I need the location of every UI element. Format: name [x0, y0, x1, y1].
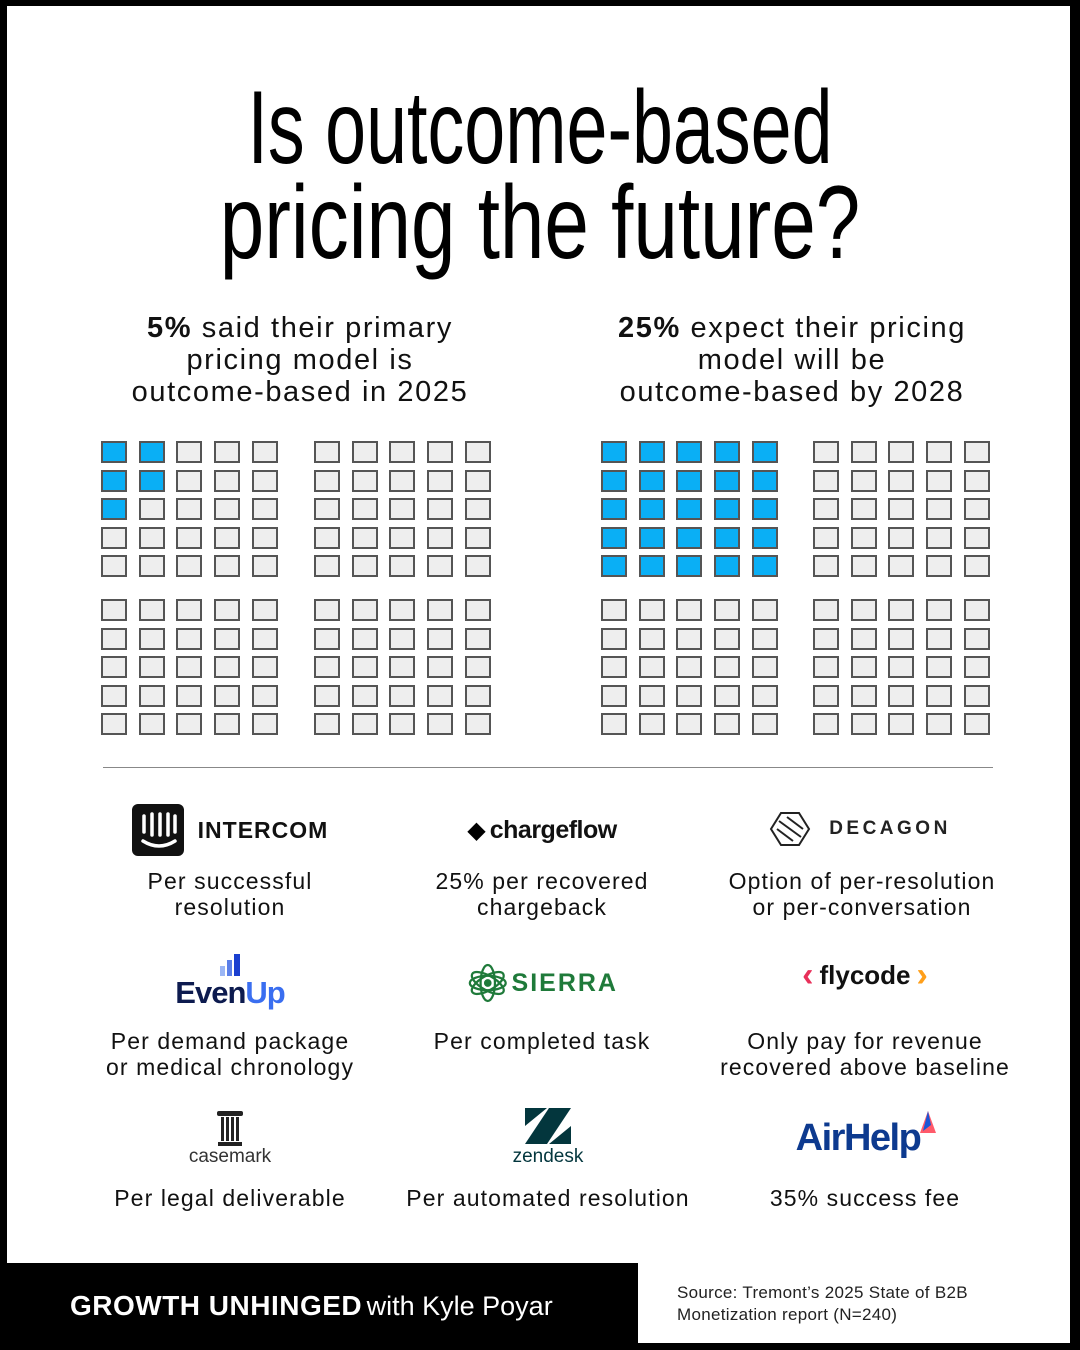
desc: sierra: Per completed task — [434, 1028, 650, 1054]
footer: brand — [0, 1263, 638, 1350]
logo: flycode: › — [917, 956, 928, 994]
heading: left stat — [132, 312, 468, 408]
desc: decagon: Option of per-resolution — [729, 868, 995, 894]
heading: left stat: outcome-based in 2025 — [132, 376, 468, 408]
footer: source: Monetization report (N=240) — [677, 1305, 897, 1324]
desc: airhelp: 35% success fee — [770, 1185, 960, 1211]
desc: evenup: Per demand package — [111, 1028, 349, 1054]
logo: evenup: EvenUp — [175, 975, 285, 1010]
desc: intercom — [148, 868, 312, 920]
title — [220, 70, 860, 280]
logo: zendesk — [513, 1108, 584, 1167]
desc: flycode: Only pay for revenue — [747, 1028, 983, 1054]
title: Is outcome-based — [247, 70, 833, 185]
desc: evenup — [106, 1028, 354, 1080]
logo: flycode — [802, 956, 928, 994]
footer: source — [638, 1263, 1070, 1343]
heading: left stat: 5% said their primary — [147, 312, 453, 344]
desc: casemark: Per legal deliverable — [114, 1185, 346, 1211]
desc: decagon: or per-conversation — [752, 894, 972, 920]
footer: source: Source: Tremont’s 2025 State of B2B — [677, 1283, 968, 1302]
heading: left stat: pricing model is — [186, 344, 414, 376]
desc: chargeflow: chargeback — [477, 894, 607, 920]
logo: flycode: flycode — [819, 960, 911, 990]
desc: evenup: or medical chronology — [106, 1054, 354, 1080]
logo: evenup — [175, 954, 285, 1010]
desc: flycode: recovered above baseline — [720, 1054, 1010, 1080]
logo: decagon — [770, 812, 951, 846]
desc: flycode — [720, 1028, 1010, 1080]
logo: casemark — [189, 1111, 272, 1167]
title: pricing the future? — [220, 164, 860, 280]
logo: sierra: SIERRA — [512, 968, 618, 996]
logo: chargeflow: chargeflow — [490, 816, 617, 844]
logo: chargeflow: ◆ — [467, 816, 486, 844]
logo: airhelp: AirHelp — [796, 1116, 920, 1158]
waffle chart: right 25% — [601, 441, 990, 735]
heading: right stat — [618, 312, 966, 408]
logo: intercom: INTERCOM — [198, 816, 328, 842]
logo: sierra — [468, 964, 618, 1002]
logo: zendesk: zendesk — [513, 1146, 583, 1167]
desc: zendesk: Per automated resolution — [406, 1185, 690, 1211]
logo: casemark: casemark — [189, 1146, 271, 1167]
waffle chart: left 5% — [101, 441, 491, 735]
desc: intercom: Per successful — [148, 868, 312, 894]
logo: intercom — [132, 804, 328, 856]
desc: chargeflow — [435, 868, 649, 920]
footer: brand: GROWTH UNHINGED with Kyle Poyar — [70, 1290, 553, 1321]
desc: decagon — [729, 868, 995, 920]
heading: right stat: 25% expect their pricing — [618, 312, 966, 344]
desc: chargeflow: 25% per recovered — [435, 868, 649, 894]
desc: intercom: resolution — [175, 894, 285, 920]
heading: right stat: outcome-based by 2028 — [620, 376, 964, 408]
heading: right stat: model will be — [698, 344, 886, 376]
logo: flycode: ‹ — [802, 956, 813, 994]
logo: decagon: DECAGON — [829, 818, 951, 839]
